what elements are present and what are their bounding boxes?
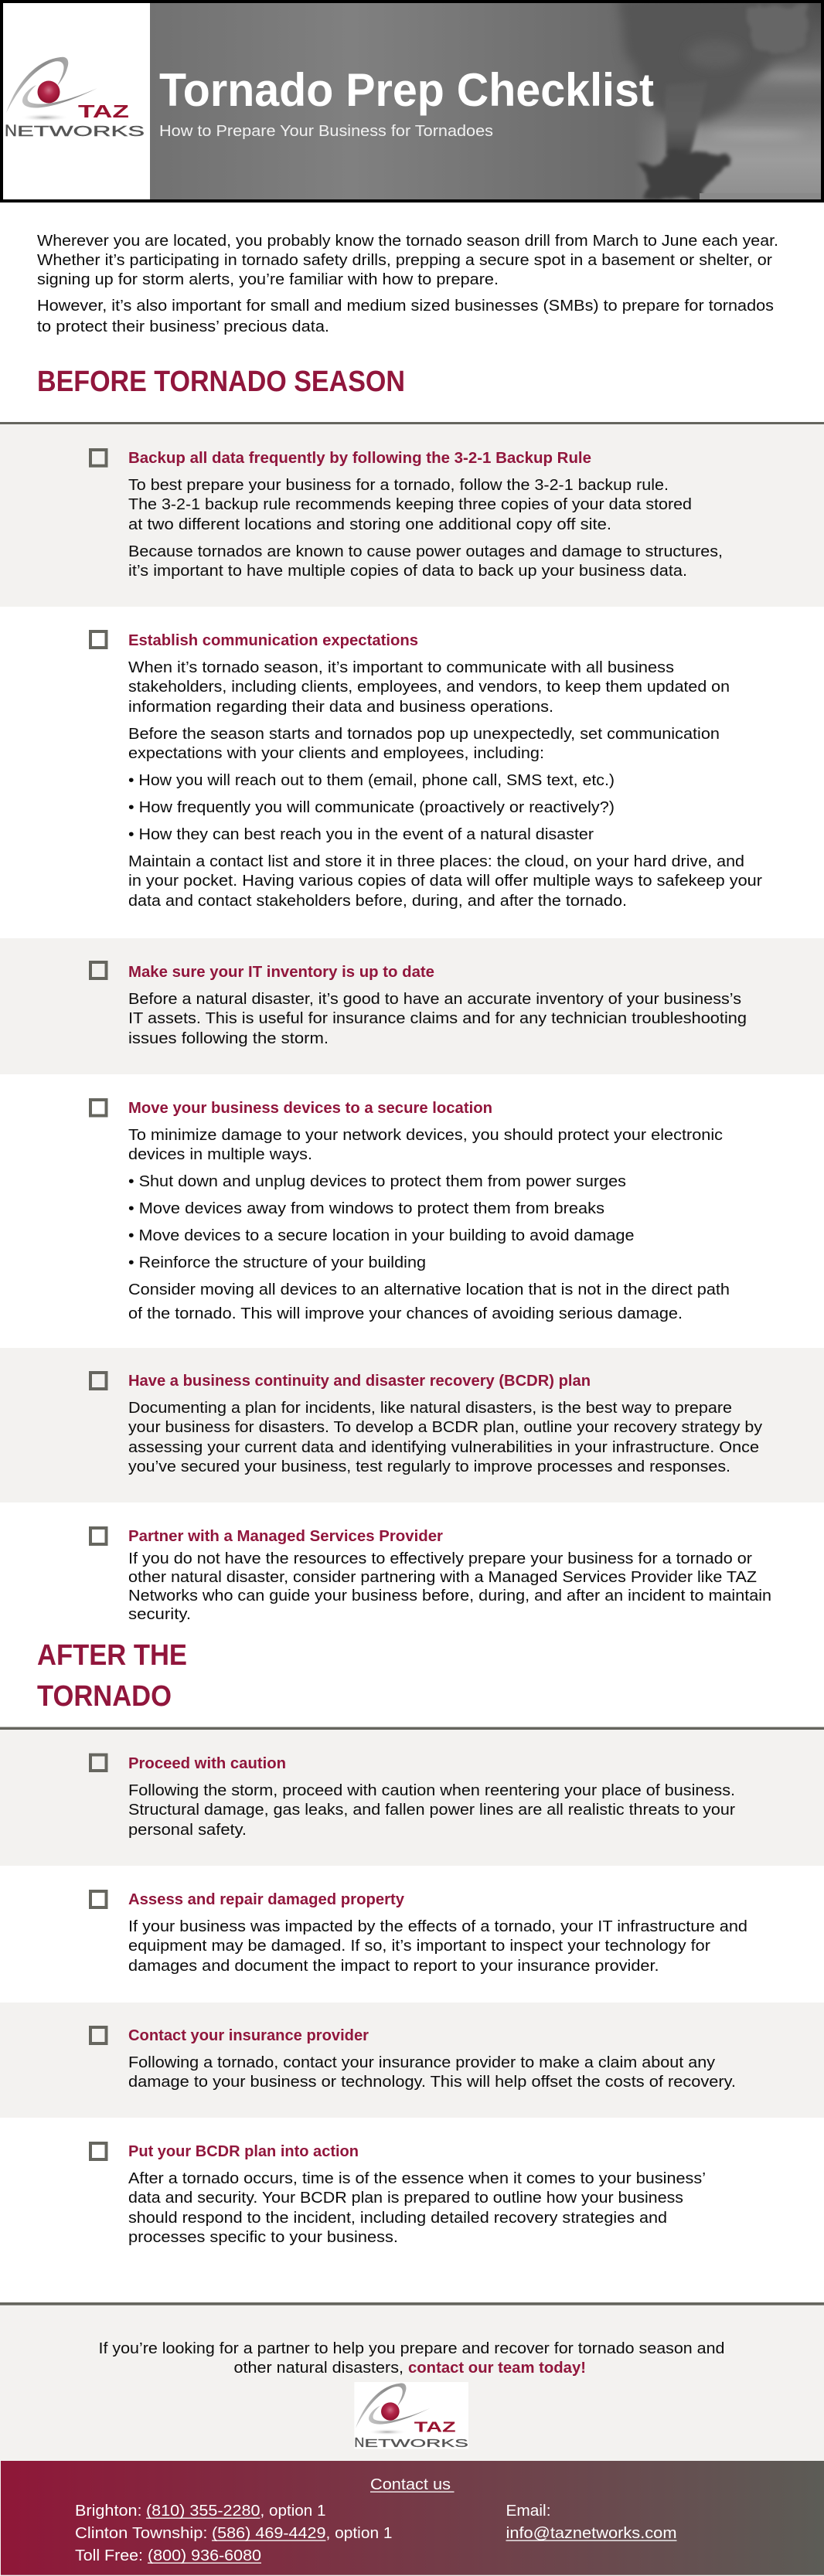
panel: secure location bbox=[0, 1074, 824, 1348]
heading: after the tornado: AFTER THE bbox=[37, 1639, 187, 1672]
item text: should respond to the incident, including detailed recovery strategies and bbox=[128, 2209, 667, 2227]
tornado photo bbox=[618, 3, 821, 199]
checkbox bbox=[90, 1100, 107, 1116]
item text: If your business was impacted by the effects of a tornado, your IT infrastructure and bbox=[128, 1918, 747, 1935]
item text: Documenting a plan for incidents, like natural disasters, is the best way to prepare bbox=[128, 1399, 732, 1417]
item text: it’s important to have multiple copies of data to back up your business data. bbox=[128, 562, 687, 580]
logo: TAZ Networks small: N bbox=[354, 2435, 364, 2450]
item text: assessing your current data and identifying vulnerabilities in your infrastructure. Once bbox=[128, 1438, 759, 1456]
checkbox bbox=[90, 2143, 107, 2159]
logo: TAZ Networks bbox=[5, 57, 145, 140]
item text bbox=[128, 1399, 763, 1475]
subtitle: How to Prepare Your Business for Tornadoes bbox=[159, 122, 493, 140]
item text bbox=[128, 476, 723, 580]
item text: security. bbox=[128, 1605, 191, 1623]
intro text: However, it’s also important for small and medium sized businesses (SMBs) to prepare for tornados bbox=[37, 297, 774, 315]
logo: TAZ Networks small bbox=[354, 2382, 468, 2450]
item text: of the tornado. This will improve your chances of avoiding serious damage. bbox=[128, 1305, 683, 1322]
item text: personal safety. bbox=[128, 1821, 247, 1839]
checkbox bbox=[90, 1754, 107, 1771]
logo: TAZ Networks: TAZ bbox=[78, 101, 129, 121]
closing text: other natural disasters, bbox=[233, 2359, 403, 2377]
item text: Structural damage, gas leaks, and fallen power lines are all realistic threats to your bbox=[128, 1801, 735, 1819]
item text: • How you will reach out to them (email, phone call, SMS text, etc.) bbox=[128, 771, 615, 789]
item text: devices in multiple ways. bbox=[128, 1145, 312, 1163]
closing text: contact our team today! bbox=[408, 2359, 586, 2377]
email: info@taznetworks.com bbox=[506, 2524, 677, 2542]
item text: After a tornado occurs, time is of the essence when it comes to your business’ bbox=[128, 2169, 706, 2187]
phone numbers: Clinton Township: bbox=[75, 2524, 207, 2542]
item text: Following a tornado, contact your insurance provider to make a claim about any bbox=[128, 2054, 716, 2071]
panel: managed services provider bbox=[0, 1502, 824, 1630]
item text: • Move devices to a secure location in your building to avoid damage bbox=[128, 1227, 635, 1244]
item text: Following the storm, proceed with caution when reentering your place of business. bbox=[128, 1781, 735, 1799]
item text: • Reinforce the structure of your building bbox=[128, 1254, 426, 1271]
item heading: Put your BCDR plan into action bbox=[128, 2142, 359, 2160]
item text: Consider moving all devices to an alternative location that is not in the direct path bbox=[128, 1281, 730, 1298]
panel: IT inventory bbox=[0, 938, 824, 1074]
item text bbox=[128, 1126, 730, 1322]
item heading: Move your business devices to a secure location bbox=[128, 1099, 492, 1117]
item heading: Contact your insurance provider bbox=[128, 2026, 369, 2044]
panel: backup bbox=[0, 424, 824, 607]
item text: in your pocket. Having various copies of data will offer multiple ways to safekeep your bbox=[128, 872, 762, 890]
item heading: Make sure your IT inventory is up to date bbox=[128, 963, 434, 981]
item text: information regarding their data and business operations. bbox=[128, 698, 553, 716]
item text: processes specific to your business. bbox=[128, 2228, 398, 2246]
panel: insurance provider bbox=[0, 2003, 824, 2118]
item text: • How they can best reach you in the event of a natural disaster bbox=[128, 825, 594, 843]
item text: Before the season starts and tornados pop up unexpectedly, set communication bbox=[128, 725, 720, 743]
phone numbers: Toll Free: bbox=[75, 2547, 143, 2564]
item text: To best prepare your business for a tornado, follow the 3-2-1 backup rule. bbox=[128, 476, 669, 494]
phone numbers: , option 1 bbox=[260, 2502, 326, 2520]
intro text: to protect their business’ precious data. bbox=[37, 318, 329, 335]
heading: after the tornado bbox=[37, 1639, 187, 1713]
item text bbox=[128, 1781, 735, 1839]
checkbox bbox=[90, 1891, 107, 1907]
item text: damages and document the impact to report to your insurance provider. bbox=[128, 1957, 659, 1975]
item text bbox=[128, 1550, 771, 1623]
panel: BCDR into action bbox=[0, 2118, 824, 2302]
panel: communication bbox=[0, 607, 824, 938]
item text: • How frequently you will communicate (proactively or reactively?) bbox=[128, 798, 615, 816]
heading: before tornado season: BEFORE TORNADO SEASON bbox=[37, 366, 405, 398]
logo: TAZ Networks: ETWORKS bbox=[17, 123, 145, 139]
item text: data and contact stakeholders before, during, and after the tornado. bbox=[128, 892, 627, 910]
heading: after the tornado: TORNADO bbox=[37, 1680, 172, 1713]
item text: When it’s tornado season, it’s important to communicate with all business bbox=[128, 658, 674, 676]
item text: other natural disaster, consider partnering with a Managed Services Provider like TAZ bbox=[128, 1568, 757, 1586]
logo: TAZ Networks small: ETWORKS bbox=[364, 2437, 468, 2450]
intro text: Wherever you are located, you probably know the tornado season drill from March to June each year. bbox=[37, 232, 778, 250]
phone numbers: (810) 355-2280 bbox=[146, 2502, 260, 2520]
checkbox bbox=[90, 2027, 107, 2043]
panel: BCDR plan bbox=[0, 1348, 824, 1502]
item text: Networks who can guide your business before, during, and after an incident to maintain bbox=[128, 1587, 771, 1604]
item text: Before a natural disaster, it’s good to have an accurate inventory of your business’s bbox=[128, 990, 741, 1008]
item text: • Move devices away from windows to protect them from breaks bbox=[128, 1200, 604, 1217]
item text: data and security. Your BCDR plan is prepared to outline how your business bbox=[128, 2189, 683, 2207]
closing text: If you’re looking for a partner to help you prepare and recover for tornado season and bbox=[99, 2339, 725, 2357]
item text: • Shut down and unplug devices to protect them from power surges bbox=[128, 1172, 626, 1190]
phone numbers: Brighton: bbox=[75, 2502, 142, 2520]
item heading: Backup all data frequently by following the 3-2-1 Backup Rule bbox=[128, 449, 591, 467]
title: Tornado Prep Checklist bbox=[159, 64, 654, 116]
item text: Because tornados are known to cause power outages and damage to structures, bbox=[128, 543, 723, 560]
item text: you’ve secured your business, test regularly to improve processes and responses. bbox=[128, 1458, 730, 1475]
item heading: Proceed with caution bbox=[128, 1754, 286, 1772]
checkbox bbox=[90, 1373, 107, 1389]
email bbox=[506, 2502, 677, 2542]
item text bbox=[128, 658, 762, 910]
item heading: Establish communication expectations bbox=[128, 631, 418, 649]
checkbox bbox=[90, 450, 107, 466]
item text: issues following the storm. bbox=[128, 1029, 329, 1047]
intro text: signing up for storm alerts, you’re familiar with how to prepare. bbox=[37, 271, 499, 288]
footer contact band bbox=[1, 2461, 824, 2575]
item text: equipment may be damaged. If so, it’s important to inspect your technology for bbox=[128, 1937, 710, 1955]
item text: To minimize damage to your network devices, you should protect your electronic bbox=[128, 1126, 723, 1144]
item text bbox=[128, 1918, 747, 1975]
item text: your business for disasters. To develop a BCDR plan, outline your recovery strategy by bbox=[128, 1418, 763, 1436]
email: Email: bbox=[506, 2502, 550, 2520]
checkbox bbox=[90, 962, 107, 978]
item text: damage to your business or technology. This will help offset the costs of recovery. bbox=[128, 2073, 736, 2091]
logo: TAZ Networks: N bbox=[5, 121, 17, 140]
item text: The 3-2-1 backup rule recommends keeping three copies of your data stored bbox=[128, 495, 692, 513]
header banner bbox=[0, 0, 824, 202]
item text: IT assets. This is useful for insurance claims and for any technician troubleshooting bbox=[128, 1009, 747, 1027]
checkbox bbox=[90, 631, 107, 648]
intro text: Whether it’s participating in tornado safety drills, prepping a secure spot in a basement or shelter, or bbox=[37, 251, 772, 269]
item text bbox=[128, 2054, 736, 2091]
logo: TAZ Networks small: TAZ bbox=[414, 2419, 456, 2435]
panel: proceed with caution bbox=[0, 1730, 824, 1866]
item text: If you do not have the resources to effectively prepare your business for a tornado or bbox=[128, 1550, 752, 1567]
item text: expectations with your clients and employees, including: bbox=[128, 744, 544, 762]
intro text bbox=[37, 232, 778, 335]
item text bbox=[128, 2169, 706, 2246]
phone numbers bbox=[75, 2502, 393, 2564]
item heading: Have a business continuity and disaster recovery (BCDR) plan bbox=[128, 1372, 591, 1390]
item text: stakeholders, including clients, employees, and vendors, to keep them updated on bbox=[128, 678, 730, 696]
phone numbers: , option 1 bbox=[326, 2524, 393, 2542]
checkbox bbox=[90, 1528, 107, 1544]
closing text bbox=[99, 2339, 725, 2377]
phone numbers: (586) 469-4429 bbox=[212, 2524, 326, 2542]
item heading: Assess and repair damaged property bbox=[128, 1890, 405, 1908]
panel: assess and repair bbox=[0, 1866, 824, 2003]
item text: Maintain a contact list and store it in three places: the cloud, on your hard drive, and bbox=[128, 852, 744, 870]
item text: at two different locations and storing one additional copy off site. bbox=[128, 516, 611, 533]
contact us link: Contact us bbox=[370, 2476, 451, 2493]
phone numbers: (800) 936-6080 bbox=[148, 2547, 261, 2564]
closing panel bbox=[0, 2302, 824, 2576]
item text bbox=[128, 990, 747, 1047]
item heading: Partner with a Managed Services Provider bbox=[128, 1527, 443, 1545]
